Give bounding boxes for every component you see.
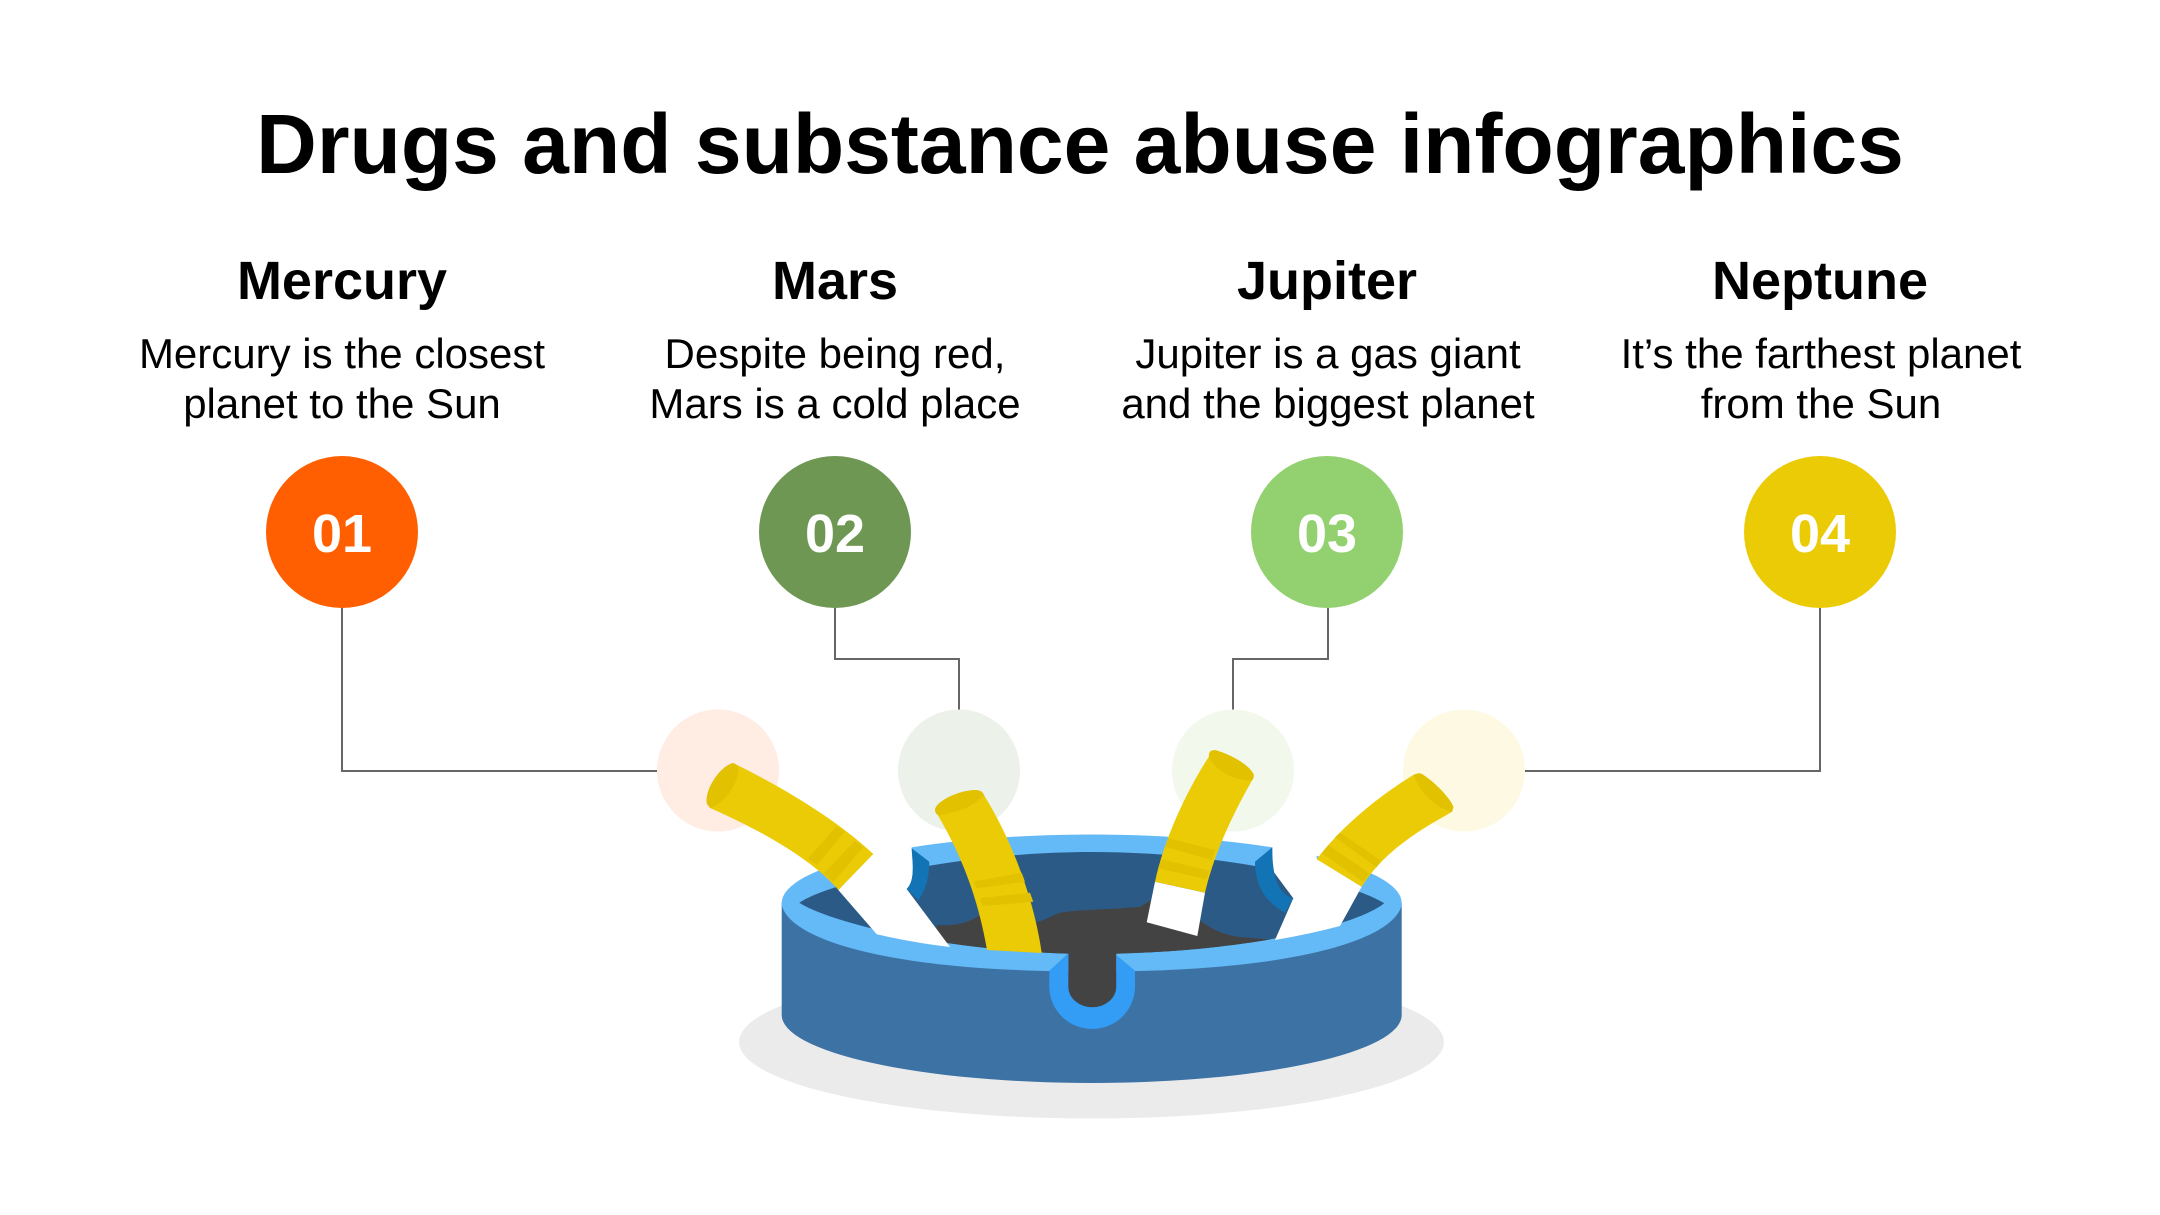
heading: Neptune: Neptune: [1712, 251, 1928, 311]
connector: 04: [1525, 608, 1820, 771]
cigarette 2: [935, 790, 1042, 953]
smoke circle: light green: [1172, 710, 1294, 832]
text: Mercury: Mercury is the closest: [139, 330, 545, 377]
ashtray interior: [799, 852, 1384, 954]
text: Jupiter: Jupiter is a gas giant: [1135, 330, 1521, 377]
right rim notch: [1255, 847, 1293, 913]
smoke circle: yellow: [1403, 710, 1525, 832]
text: Mercury: planet to the Sun: [183, 380, 501, 427]
number badge 04: 04: [1790, 504, 1850, 564]
ashtray rim: [782, 835, 1402, 972]
cigarette 4: [1317, 773, 1454, 887]
cigarette 1: [707, 763, 873, 890]
right white cutout: [1272, 825, 1362, 940]
text: Mars: Mars is a cold place: [649, 380, 1021, 427]
number badge 04: [1744, 456, 1896, 608]
number badge 01: [266, 456, 418, 608]
ashtray with cigarettes: [707, 750, 1454, 1118]
number badge 02: 02: [805, 504, 865, 564]
smoke circle: dark green: [898, 710, 1020, 832]
ashtray shadow: [739, 966, 1444, 1118]
connector: 03: [1233, 608, 1328, 710]
text: Mercury: [139, 330, 545, 427]
left white cutout: [838, 825, 950, 947]
number badge 02: [759, 456, 911, 608]
text: Neptune: It’s the farthest planet: [1621, 330, 2021, 377]
smoke circle: orange: [657, 710, 779, 832]
text: Neptune: [1621, 330, 2022, 427]
text: Jupiter: [1121, 330, 1535, 427]
text: Neptune: from the Sun: [1701, 380, 1941, 427]
ashtray body: [782, 903, 1402, 1083]
title: Drugs and substance abuse infographics: [256, 97, 1904, 191]
connector: 02: [835, 608, 959, 710]
cigarette rest notch inner: [1068, 945, 1116, 1007]
text: Mars: Despite being red,: [665, 330, 1005, 377]
left rim notch: [907, 848, 929, 900]
number badge 01: 01: [312, 504, 372, 564]
heading: Mars: Mars: [772, 251, 898, 311]
text: Jupiter: and the biggest planet: [1121, 380, 1535, 427]
heading: Jupiter: Jupiter: [1237, 251, 1417, 311]
number badge 03: [1251, 456, 1403, 608]
cigarette rest notch: [1049, 953, 1135, 1029]
text: Mars: [649, 330, 1021, 427]
number badge 03: 03: [1297, 504, 1357, 564]
ash pile: [936, 900, 1270, 954]
cigarette 3: [1147, 750, 1254, 936]
connector lines and ashtray illustration: [341, 608, 1821, 1118]
connector: 01: [342, 608, 658, 771]
heading: Mercury: Mercury: [237, 251, 447, 311]
